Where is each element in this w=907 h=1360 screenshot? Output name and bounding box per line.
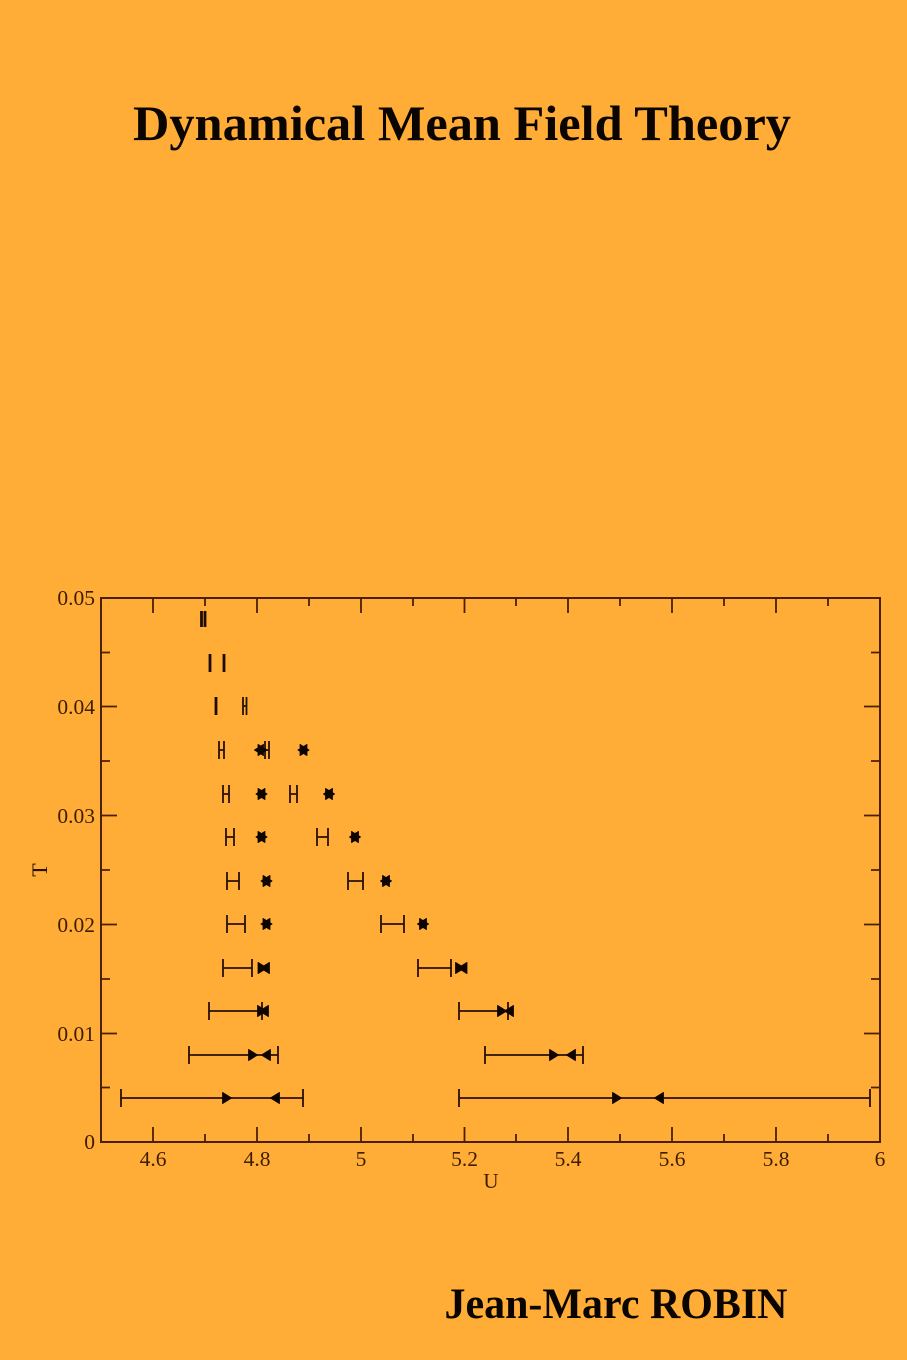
x axis labels: 6 [875, 1147, 886, 1171]
chart: T vs U phase diagram [27, 586, 886, 1193]
x axis labels: 5.2 [451, 1147, 478, 1171]
y axis labels [57, 586, 95, 1154]
triangle markers [222, 744, 664, 1104]
title: Dynamical Mean Field Theory [133, 95, 791, 151]
x axis labels: 5 [356, 1147, 366, 1171]
x axis labels: 4.6 [140, 1147, 167, 1171]
y axis title: T [27, 863, 52, 877]
x axis labels: 5.4 [555, 1147, 582, 1171]
x axis labels [140, 1147, 886, 1171]
y axis labels: 0.04 [57, 695, 95, 719]
x axis title: U [483, 1169, 499, 1193]
plot frame [101, 598, 880, 1142]
y axis labels: 0.03 [57, 804, 95, 828]
error bars [121, 697, 870, 1107]
y axis labels: 0 [84, 1130, 95, 1154]
x axis labels: 5.6 [659, 1147, 686, 1171]
x axis labels: 5.8 [763, 1147, 789, 1171]
thin-gap bars at high temperature [202, 611, 224, 715]
x axis labels: 4.8 [244, 1147, 270, 1171]
y axis ticks [101, 652, 880, 1088]
y axis labels: 0.02 [57, 913, 95, 937]
y axis labels: 0.01 [57, 1022, 95, 1046]
author: Jean-Marc ROBIN [444, 1281, 788, 1328]
y axis labels: 0.05 [57, 586, 95, 610]
x axis ticks [153, 598, 828, 1142]
